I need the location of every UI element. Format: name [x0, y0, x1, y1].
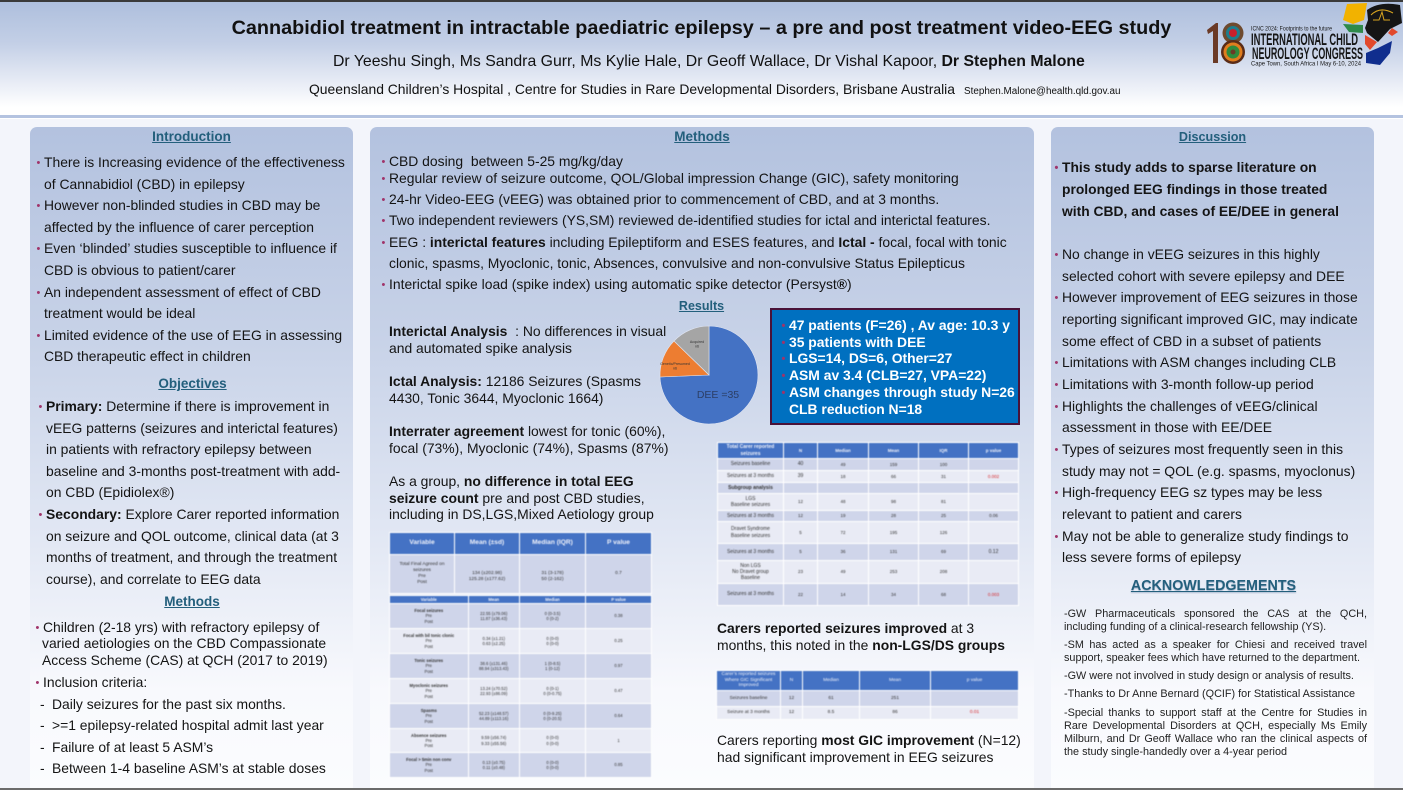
table: carer reported seizures: 98 — [891, 499, 896, 504]
table: carer reported seizures: 100 — [940, 462, 947, 467]
table: total seizures: Total Final Agreed on — [399, 562, 445, 567]
text block: acknowledgements: -SM has acted as a speaker for Chiesi and received travel — [1064, 639, 1367, 651]
table: carer reported seizures: 195 — [890, 530, 897, 535]
table: GIC improved group: Where GIC Significant — [725, 678, 772, 682]
table: seizure types: 0 (0-0) — [546, 641, 559, 646]
table: seizure types: Post — [425, 694, 433, 699]
text block: discussion bullets: However improvement of EEG seizures in those — [1062, 289, 1358, 305]
text block: introduction bullets: affected by the influence of carer perception — [44, 219, 314, 235]
table: seizure types: 0 (0-9.25) — [543, 711, 562, 716]
text block: discussion bullets: Limitations with ASM changes including CLB — [1062, 354, 1336, 370]
callout: patient summary — [770, 308, 1020, 425]
table: seizure types: 0.13 (±0.75) — [482, 760, 505, 765]
table: seizure types: Post — [425, 743, 433, 748]
table: seizure types: 0 (0-0) — [546, 760, 559, 765]
table: carer reported seizures: Baseline seizures — [731, 502, 770, 508]
table: total seizures — [388, 532, 652, 594]
text block: discussion bullets: May not be able to generalize study findings to — [1062, 528, 1348, 544]
table: seizure types: Pre — [425, 738, 432, 743]
panel: discussion and acknowledgements — [1051, 127, 1374, 790]
table: carer reported seizures: 49 — [840, 462, 846, 467]
callout: patient summary: 35 patients with DEE — [789, 334, 926, 350]
text block: objectives — [38, 398, 340, 587]
table: carer reported seizures: 131 — [890, 549, 897, 554]
table: seizure types: 0.97 — [614, 663, 623, 668]
table: carer reported seizures: N — [799, 448, 802, 453]
table: carer reported seizures: p value — [986, 448, 1001, 453]
slice: genetic — [660, 341, 709, 377]
callout: patient summary: 47 patients (F=26) , Av age: 10.3 y — [789, 317, 1010, 333]
table: carer reported seizures: Dravet Syndrome — [731, 526, 770, 532]
text block: GIC improvement: had significant improvement in EEG seizures — [717, 748, 993, 764]
logo text: ICNC 2024: Footprints to the future — [1251, 26, 1333, 32]
table: carer reported seizures: Seizures baseline — [731, 461, 770, 467]
text block: discussion bullets: Types of seizures most frequently seen in this — [1062, 441, 1343, 457]
panel: introduction objectives methods: - — [40, 738, 45, 754]
table: seizure types: 13.24 (±70.52) — [480, 686, 507, 691]
panel: introduction objectives methods: - — [40, 717, 45, 733]
table: carer reported seizures: 40 — [798, 461, 803, 467]
text block: introduction bullets: of Cannabidiol (CBD) in epilepsy — [44, 176, 245, 192]
table: carer reported seizures: 126 — [940, 530, 947, 535]
table: carer reported seizures: 68 — [941, 592, 946, 597]
text block: key message: This study adds to sparse literature on — [1062, 159, 1317, 175]
table: GIC improved group: Improved — [738, 683, 758, 688]
table: seizure types: Post — [425, 719, 433, 724]
text block: methods bullets: EEG : interictal features including Epileptiform and ESES features, and Ictal - focal, focal with tonic — [389, 234, 1007, 250]
table: seizure types: 0.63 (±2.25) — [482, 641, 505, 646]
text block: introduction bullets: There is Increasing evidence of the effectiveness — [44, 154, 345, 170]
table: total seizures: Post — [417, 580, 427, 585]
table: seizure types: Post — [425, 669, 433, 674]
table: carer reported seizures: 39 — [798, 473, 803, 479]
table: GIC improved group: Seizures baseline — [730, 696, 767, 700]
table: GIC improved group: 86 — [892, 710, 898, 715]
text block: discussion bullets: High-frequency EEG sz types may be less — [1062, 484, 1322, 500]
table: seizure types: 0.25 — [614, 638, 623, 643]
table: carer reported seizures: 48 — [840, 499, 846, 504]
table: carer reported seizures: 159 — [890, 462, 897, 467]
table: carer reported seizures: seizures — [740, 450, 760, 456]
text block: carers reported improvement: months, this noted in the non-LGS/DS groups — [717, 637, 1005, 653]
heading: results: Results — [679, 299, 724, 313]
panel: introduction objectives methods: - — [40, 760, 45, 776]
logo numeral 18 — [1207, 22, 1245, 64]
pie chart: patient groups — [660, 326, 758, 424]
text block: acknowledgements: Milburn, and Dr Geoff Wallace who ran the clinical aspects of — [1064, 733, 1367, 745]
text block: results analysis: focal (73%), Myoclonic (74%), Spasms (87%) — [389, 440, 668, 456]
table: seizure types: Pre — [425, 613, 432, 618]
table: carer reported seizures: Seizures at 3 months — [727, 513, 774, 519]
table: GIC improved group: Median — [823, 678, 839, 682]
table: seizure types: 9.33 (±55.56) — [481, 740, 506, 746]
table: carer reported seizures: 0.12 — [989, 549, 998, 555]
text block: GIC improvement — [717, 732, 1021, 765]
table: total seizures: 31 (3-178) — [541, 571, 564, 576]
text block: inclusion criteria: Failure of at least 5 ASM’s — [52, 738, 213, 754]
table: GIC improved group: 0.01 — [970, 710, 979, 715]
table: GIC improved group: 61 — [828, 696, 834, 700]
table: seizure types: 9.59 (±56.74) — [481, 735, 506, 740]
logo text: Cape Town, South Africa I May 6-10, 2024 — [1251, 62, 1362, 68]
table: carer reported seizures: 49 — [840, 569, 846, 574]
table: seizure types: 0 (0-1) — [546, 686, 559, 691]
table: carer reported seizures: Baseline seizures — [731, 532, 770, 538]
table: seizure types: 0.64 — [614, 713, 623, 718]
table: seizure types: Post — [425, 619, 433, 624]
pie label: acquired: n6 — [695, 344, 699, 348]
table: carer reported seizures: 5 — [799, 549, 802, 554]
table: carer reported seizures: Mean — [888, 448, 899, 453]
table: seizure types: 1 (0-12) — [545, 666, 560, 671]
text block: discussion bullets: No change in vEEG seizures in this highly — [1062, 246, 1320, 262]
text block: carers reported improvement: Carers reported seizures improved at 3 — [717, 620, 974, 636]
text block: objectives: Primary: Determine if there is improvement in — [46, 398, 329, 414]
table: seizure types: 52.23 (±148.57) — [479, 711, 509, 716]
text block: discussion bullets: study may not = QOL (e.g. spasms, myoclonus) — [1062, 463, 1355, 479]
table: carer reported seizures: 23 — [798, 569, 803, 574]
logo africa head — [1343, 3, 1402, 65]
table: carer reported seizures: 69 — [941, 549, 946, 554]
text block: introduction bullets — [36, 154, 345, 364]
table: GIC improved group: Mean — [889, 678, 901, 682]
table: seizure types: 0.34 (±1.21) — [482, 636, 505, 641]
table: seizure types: Pre — [425, 663, 432, 668]
table: seizure types: Pre — [425, 638, 432, 643]
text block: discussion bullets: some effect of CBD in a subset of patients — [1062, 333, 1321, 349]
authors: Dr Yeeshu Singh, Ms Sandra Gurr, Ms Kylie Hale, Dr Geoff Wallace, Dr Vishal Kapoor, Dr Stephen Malone — [333, 52, 1085, 70]
text block: methods bullets: Two independent reviewers (YS,SM) reviewed de-identified studies for ictal and interictal features. — [389, 212, 990, 228]
text block: results analysis: seizure count pre and post CBD studies, — [389, 490, 645, 506]
table: seizure types: Focal > 5min non conv — [406, 757, 451, 762]
text block: population — [36, 618, 328, 668]
table: seizure types: Focal with bil tonic clonic — [403, 633, 454, 638]
text block: results analysis — [389, 323, 668, 522]
table: seizure types: Tonic seizures — [414, 658, 443, 663]
callout: patient summary: LGS=14, DS=6, Other=27 — [789, 350, 952, 366]
table: seizure types: 0 (0-2) — [546, 616, 559, 621]
table: carer reported seizures — [716, 442, 1020, 606]
text block: results analysis: including in DS,LGS,Mixed Aetiology group — [389, 506, 654, 522]
text block: introduction bullets: Limited evidence of the use of EEG in assessing — [44, 327, 342, 343]
text block: GIC improvement: Carers reporting most GIC improvement (N=12) — [717, 732, 1021, 748]
heading: methods left: Methods — [164, 594, 220, 609]
text block: discussion bullets: selected cohort with severe epilepsy and DEE — [1062, 268, 1345, 284]
table: total seizures: Variable — [409, 539, 435, 546]
pie label: DEE: DEE =35 — [697, 389, 739, 401]
table: carer reported seizures: 66 — [891, 474, 896, 479]
table: carer reported seizures: Baseline — [741, 575, 760, 581]
decorative footer bar — [0, 788, 1403, 790]
slice: acquired — [674, 326, 709, 375]
table: carer reported seizures: 14 — [840, 592, 846, 597]
table: total seizures: 134 (±202.98) — [472, 571, 502, 576]
heading: objectives: Objectives — [158, 376, 227, 391]
table: carer reported seizures: 31 — [941, 474, 946, 479]
table: carer reported seizures: Seizures at 3 months — [727, 591, 774, 597]
table: carer reported seizures: 22 — [798, 592, 803, 597]
callout: patient summary: CLB reduction N=18 — [789, 401, 922, 417]
text block: inclusion criteria: Between 1-4 baseline ASM’s at stable doses — [52, 760, 326, 776]
pie label: acquired: Acquired — [690, 340, 704, 344]
table: carer reported seizures: 0.002 — [988, 474, 999, 479]
table: seizure types: 1 (0-8.5) — [545, 661, 560, 666]
table: GIC improved group: p value — [967, 678, 982, 682]
heading: acknowledgements: ACKNOWLEDGEMENTS — [1131, 578, 1296, 594]
table: seizure types: 0 (0-3.5) — [545, 611, 560, 616]
text block: introduction bullets: Even ‘blinded’ studies susceptible to influence if — [44, 240, 337, 256]
table: GIC improved group: 251 — [891, 696, 899, 700]
table: total seizures: 125.28 (±177.62) — [469, 577, 505, 582]
table: seizure types: 22.55 (±79.06) — [480, 611, 507, 616]
table: seizure types: 0.47 — [614, 688, 623, 693]
table: carer reported seizures: LGS — [745, 496, 756, 502]
congress logo — [1207, 3, 1402, 68]
text block: methods bullets: Regular review of seizure outcome, QOL/Global impression Change (GIC), safety monitoring — [389, 170, 959, 186]
table: total seizures: Pre — [418, 574, 426, 579]
table: carer reported seizures: 5 — [799, 530, 802, 535]
table: carer reported seizures: 12 — [798, 499, 803, 504]
table: carer reported seizures: 0.06 — [989, 513, 998, 518]
text block: methods bullets: 24-hr Video-EEG (vEEG) was obtained prior to commencement of CBD, and at 3 months. — [389, 191, 939, 207]
text block: results analysis: Interrater agreement lowest for tonic (60%), — [389, 423, 665, 439]
table: carer reported seizures: 25 — [941, 513, 946, 518]
text block: objectives: Secondary: Explore Carer reported information — [46, 506, 339, 522]
text block: inclusion criteria — [36, 674, 326, 776]
table: total seizures: Median (IQR) — [532, 539, 573, 546]
text block: methods bullets: Interictal spike load (spike index) using automatic spike detector (Persyst®) — [389, 276, 852, 292]
table: seizure types: Median — [545, 597, 560, 602]
table: carer reported seizures: 34 — [891, 592, 896, 597]
decorative band — [0, 115, 1403, 118]
text block: results analysis: and automated spike analysis — [389, 340, 572, 356]
panel: introduction objectives methods — [30, 127, 353, 790]
text block: discussion bullets: Limitations with 3-month follow-up period — [1062, 376, 1314, 392]
text block: discussion bullets: assessment in those with EE/DEE — [1062, 419, 1272, 435]
heading: methods: Methods — [674, 129, 730, 144]
table: total seizures: Mean (±sd) — [470, 539, 504, 546]
table: total seizures: 50 (2-162) — [541, 577, 564, 582]
email: Stephen.Malone@health.qld.gov.au — [964, 86, 1120, 96]
text block: inclusion criteria: Inclusion criteria: — [43, 674, 147, 690]
table: seizure types: 0 (0-0) — [546, 735, 559, 740]
callout: patient summary: ASM av 3.4 (CLB=27, VPA=22) — [789, 367, 986, 383]
table: carer reported seizures: 72 — [840, 530, 846, 535]
table: seizure types: P value — [611, 597, 626, 602]
table: carer reported seizures: No Dravet group — [732, 569, 769, 575]
callout: patient summary: ASM changes through study N=26 — [789, 384, 1015, 400]
table: seizure types: 0.85 — [614, 762, 623, 767]
header band — [0, 0, 1403, 119]
table: seizure types: Pre — [425, 713, 432, 718]
table: seizure types: 22.93 (±86.09) — [480, 691, 507, 696]
table: seizure types: Post — [425, 768, 433, 773]
table: GIC improved group: N — [790, 678, 793, 682]
text block: introduction bullets: CBD is obvious to patient/carer — [44, 262, 235, 278]
table: GIC improved group: Carer’s reported seizures — [722, 672, 775, 677]
table: carer reported seizures: 19 — [840, 513, 846, 518]
table: carer reported seizures: Non LGS — [740, 563, 761, 569]
table: carer reported seizures: Seizures at 3 months — [727, 549, 774, 555]
text block: introduction bullets: treatment would be ideal — [44, 305, 195, 321]
title: Cannabidiol treatment in intractable paediatric epilepsy – a pre and post treatment video-EEG study — [232, 17, 1171, 39]
text block: discussion bullets — [1054, 246, 1358, 565]
table: seizure types: 38.6 (±131.46) — [480, 661, 507, 666]
text block: acknowledgements: -GW Pharmaceuticals sponsored the CAS at the QCH, — [1064, 608, 1367, 620]
table: seizure types: 0 (0-0) — [546, 740, 559, 746]
text block: methods bullets — [382, 153, 1007, 292]
table: seizure types: 11.87 (±36.43) — [480, 616, 507, 621]
table: total seizures: 0.7 — [615, 571, 622, 576]
text block: key message: prolonged EEG findings in those treated — [1062, 181, 1327, 197]
table: carer reported seizures: 208 — [940, 569, 947, 574]
text block: objectives: on CBD (Epidiolex®) — [46, 484, 174, 500]
text block: discussion bullets: relevant to patient and carers — [1062, 506, 1242, 522]
slice: DEE — [660, 326, 758, 424]
text block: introduction bullets: However non-blinded studies in CBD may be — [44, 197, 320, 213]
heading: discussion: Discussion — [1179, 130, 1246, 144]
table: seizure types: Variable — [421, 597, 437, 602]
table: carer reported seizures: 28 — [891, 513, 896, 518]
text block: discussion bullets: less severe forms of epilepsy — [1062, 549, 1241, 565]
text block: methods bullets: clonic, spasms, Myoclonic, tonic, Absences, convulsive and non-convulsive Status Epilepticus — [389, 255, 965, 271]
text block: objectives: course), and correlate to EEG data — [46, 571, 261, 587]
text block: results analysis: As a group, no difference in total EEG — [389, 473, 634, 489]
table: carer reported seizures: Seizures at 3 months — [727, 473, 774, 479]
table: carer reported seizures: Median — [835, 448, 851, 453]
logo text — [1251, 26, 1363, 68]
table: carer reported seizures: 18 — [840, 474, 846, 479]
text block: introduction bullets: CBD therapeutic effect in children — [44, 348, 251, 364]
table: seizure types: Focal seizures — [414, 608, 443, 613]
text block: population: Children (2-18 yrs) with refractory epilepsy of — [43, 618, 319, 634]
panel: introduction objectives methods: - — [40, 696, 45, 712]
pie label: genetic: Genetic/Presumed — [660, 362, 690, 366]
table: GIC improved group: Seizure at 3 months — [727, 710, 770, 715]
panel: methods and results — [370, 127, 1034, 790]
text block: inclusion criteria: Daily seizures for the past six months. — [52, 696, 286, 712]
text block: key message — [1054, 159, 1339, 219]
table: seizure types: 0 (0-0) — [546, 765, 559, 770]
text block: objectives: in patients with refractory epilepsy between — [46, 441, 312, 457]
affiliation: Queensland Children’s Hospital , Centre for Studies in Rare Developmental Disorders, Brisbane Australia — [309, 81, 955, 97]
text block: discussion bullets: reporting significant improved GIC, may indicate — [1062, 311, 1358, 327]
text block: objectives: vEEG patterns (seizures and interictal features) — [46, 420, 338, 436]
table: seizure types: Spasms — [421, 708, 437, 713]
table: seizure types: 0 (0-0) — [546, 636, 559, 641]
table: seizure types: Pre — [425, 688, 432, 693]
text block: population: Access Scheme (CAS) at QCH (2017 to 2019) — [42, 652, 328, 668]
table: seizure types: 0 (0-20.5) — [543, 716, 562, 721]
table: GIC improved group — [716, 670, 1019, 719]
table: seizure types: Myoclonic seizures — [410, 683, 448, 688]
text block: carers reported improvement — [717, 620, 1005, 653]
table: seizure types: Post — [425, 644, 433, 649]
table: carer reported seizures: 12 — [798, 513, 803, 518]
table: GIC improved group: 8.5 — [828, 710, 834, 715]
text block: results analysis: Interictal Analysis : No differences in visual — [389, 323, 666, 339]
pie label: genetic: n6 — [673, 366, 677, 370]
table: carer reported seizures: 81 — [941, 499, 946, 504]
table: carer reported seizures: 0.003 — [988, 592, 999, 597]
table: carer reported seizures: IQR — [939, 448, 948, 453]
text block: results analysis: Ictal Analysis: 12186 Seizures (Spasms — [389, 373, 641, 389]
table: seizure types: 0.11 (±0.48) — [483, 765, 505, 770]
heading: introduction: Introduction — [152, 129, 231, 144]
table: seizure types: 88.94 (±313.43) — [479, 666, 509, 671]
table: seizure types: 44.89 (±113.16) — [479, 716, 508, 721]
text block: population: varied aetiologies on the CBD Compassionate — [42, 635, 326, 651]
text block: results analysis: 4430, Tonic 3644, Myoclonic 1664) — [389, 390, 603, 406]
table: seizure types — [389, 596, 652, 778]
text block: methods bullets: CBD dosing between 5-25 mg/kg/day — [389, 153, 623, 169]
table: carer reported seizures: 36 — [840, 549, 846, 554]
text block: objectives: months of treatment, and through the treatment — [46, 549, 337, 565]
table: carer reported seizures: 253 — [890, 569, 897, 574]
table: total seizures: seizures — [413, 568, 431, 573]
text block: acknowledgements: Rare Developmental Disorders at QCH, especially Ms Emily — [1064, 720, 1367, 732]
table: carer reported seizures: Subgroup analysis — [728, 485, 773, 491]
text block: acknowledgements: -Special thanks to support staff at the Centre for Studies in — [1064, 707, 1367, 719]
table: seizure types: Pre — [425, 762, 432, 767]
table: seizure types: 1 — [617, 738, 620, 743]
text block: acknowledgements: including funding of a clinical-research fellowship (YS). support, speaker fees which have returned to the department. -GW were not involved in study design or analysis of results. -Thanks to Dr Anne Bernard (QCIF) for Statistical Assistance the study single-handedly over a 4-year period — [1064, 621, 1360, 758]
table: carer reported seizures: Total Carer reported — [727, 444, 774, 450]
table: seizure types: 0 (0-0.75) — [543, 691, 562, 696]
table: total seizures: P value — [607, 539, 630, 546]
table: seizure types: 0.38 — [614, 613, 623, 618]
table: GIC improved group: 12 — [789, 696, 794, 700]
text block: introduction bullets: An independent assessment of effect of CBD — [44, 284, 321, 300]
table: seizure types: Mean — [488, 597, 499, 602]
text block: objectives: on seizure and QOL outcome, clinical data (at 3 — [46, 528, 339, 544]
text block: objectives: baseline and 3-months post-treatment with add- — [46, 463, 340, 479]
table: GIC improved group: 12 — [789, 710, 794, 715]
table: seizure types: Absence seizures — [411, 733, 446, 738]
text block: discussion bullets: Highlights the challenges of vEEG/clinical — [1062, 398, 1318, 414]
text block: inclusion criteria: >=1 epilepsy-related hospital admit last year — [52, 717, 324, 733]
text block: key message: with CBD, and cases of EE/DEE in general — [1062, 203, 1339, 219]
